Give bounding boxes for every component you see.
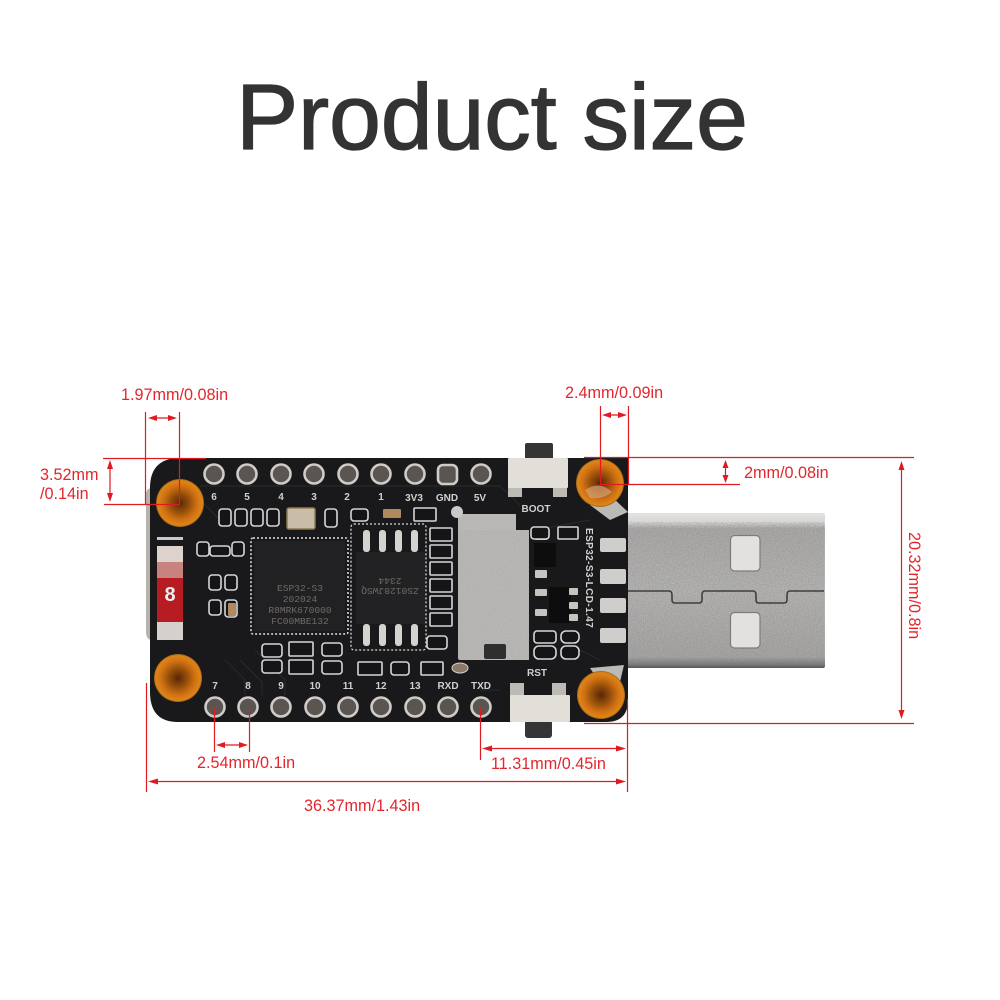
- dimension: 11.31mm/0.45in: [480, 708, 626, 773]
- USB solder pads: [600, 538, 626, 643]
- dimension: 3.52mm/0.14in: /0.14in: [40, 485, 89, 503]
- dimension: 11.31mm/0.45in: 11.31mm/0.45in: [491, 755, 606, 773]
- mounting holes: [154, 459, 628, 719]
- silkscreen labels top: 3: [311, 492, 317, 503]
- USB connector: [626, 513, 825, 668]
- silkscreen labels bottom: 7: [212, 681, 218, 692]
- dimension: 3.52mm/0.14in: [40, 458, 206, 504]
- dimension: 2.4mm/0.09in: [565, 384, 663, 485]
- red connector: [157, 537, 183, 640]
- dimension: 20.32mm/0.8in: 20.32mm/0.8in: [905, 532, 923, 639]
- silkscreen labels bottom: RXD: [437, 681, 459, 692]
- crystal: [287, 508, 315, 529]
- tantalum capacitors: [228, 509, 555, 640]
- dimension: 2.4mm/0.09in: 2.4mm/0.09in: [565, 384, 663, 402]
- silkscreen labels bottom: 10: [309, 681, 321, 692]
- RST label: RST: [527, 668, 547, 679]
- dimension: 36.37mm/1.43in: [146, 683, 628, 815]
- passive grid lower middle: [262, 508, 452, 675]
- silkscreen labels bottom: 8: [245, 681, 251, 692]
- USB connector holes: [730, 536, 760, 648]
- silkscreen labels bottom: 13: [409, 681, 421, 692]
- ESP32-S3 chip: 202024: [283, 594, 318, 605]
- dimension: 3.52mm/0.14in: 3.52mm: [40, 466, 98, 484]
- silkscreen labels bottom: 12: [375, 681, 387, 692]
- dimension: 20.32mm/0.8in: [584, 461, 923, 724]
- dimension: 1.97mm/0.08in: 1.97mm/0.08in: [121, 386, 228, 404]
- small passive components top left: [197, 509, 368, 617]
- title: Product size: [236, 65, 748, 169]
- metal shield: [451, 506, 529, 673]
- ESP32-S3 chip: R8MRK670000: [268, 605, 332, 616]
- dimension: 2mm/0.08in: 2mm/0.08in: [744, 464, 829, 482]
- board edge: [146, 488, 152, 640]
- silkscreen labels top: 5V: [474, 493, 486, 504]
- dimension: 36.37mm/1.43in: 36.37mm/1.43in: [304, 797, 420, 815]
- USB connector seam: [628, 591, 824, 603]
- silkscreen labels top: [211, 492, 486, 504]
- flash chip: 2344: [378, 575, 402, 586]
- PCB board: [146, 443, 628, 738]
- dimension: 2mm/0.08in: [584, 458, 914, 484]
- silkscreen labels top: GND: [436, 493, 458, 504]
- board body: [150, 458, 628, 722]
- ESP32-S3 chip: [251, 538, 348, 634]
- silkscreen labels bottom: [212, 681, 491, 692]
- silkscreen labels top: 5: [244, 492, 250, 503]
- silkscreen labels bottom: 11: [343, 681, 354, 692]
- BOOT label: BOOT: [522, 504, 550, 515]
- board name label: ESP32-S3-LCD-1.47: [583, 528, 594, 628]
- header pins bottom row: [206, 698, 490, 716]
- silkscreen labels top: 1: [378, 492, 384, 503]
- ESP32-S3 chip: FC00MBE132: [271, 616, 329, 627]
- flash chip: [351, 524, 426, 650]
- silkscreen labels top: 3V3: [405, 493, 423, 504]
- silkscreen labels top: 2: [344, 492, 350, 503]
- right side components: [531, 527, 626, 659]
- silkscreen labels top: 6: [211, 492, 217, 503]
- bottom button: [510, 683, 570, 722]
- silkscreen labels bottom: 9: [278, 681, 284, 692]
- side button nubs: [525, 443, 553, 738]
- silkscreen labels bottom: TXD: [471, 681, 491, 692]
- silkscreen labels top: 4: [278, 492, 284, 503]
- ESP32-S3 chip: ESP32-S3: [277, 583, 323, 594]
- top button: [508, 458, 568, 497]
- header pins top row: [204, 464, 490, 484]
- dimension: 2.54mm/0.1in: [197, 708, 295, 772]
- red connector: 8: [164, 584, 176, 606]
- dimension: 2.54mm/0.1in: 2.54mm/0.1in: [197, 754, 295, 772]
- traces: [200, 486, 600, 695]
- dimension: 1.97mm/0.08in: [121, 386, 228, 504]
- flash chip: ZS0128JWSQ: [361, 585, 419, 596]
